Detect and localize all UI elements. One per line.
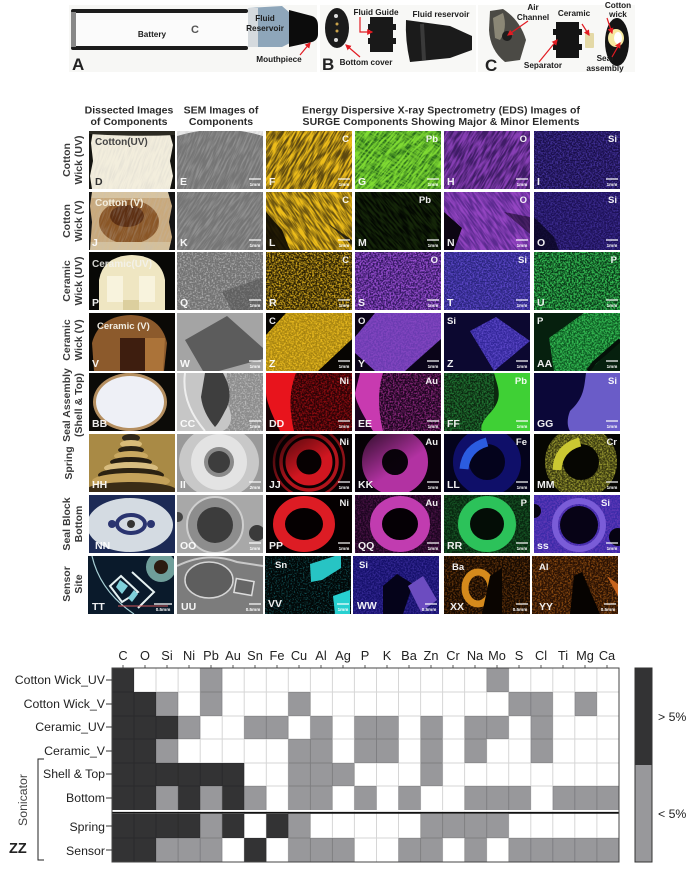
panel QQ: gold map: 1mm [428, 546, 438, 551]
panel I: silicon map [534, 131, 620, 189]
panel DD: nickel map [266, 373, 352, 431]
sample row labels: Cotton Wick_UV [15, 673, 106, 687]
panel WW: silicon map: Si [359, 560, 368, 571]
panel J: cotton wick V photo: Cotton (V) [95, 198, 143, 209]
panel T: silicon map: Si [518, 255, 527, 266]
row label: seal assembly: Seal Assembly [61, 368, 73, 442]
panel S: oxygen map: O [431, 255, 438, 266]
sample row labels [15, 673, 106, 858]
air channel shell: Channel [517, 13, 549, 22]
air channel shell: Air [527, 3, 540, 12]
panel U: phosphorus map [534, 252, 620, 310]
panel D: cotton wick UV photo: Cotton(UV) [95, 137, 148, 148]
panel W: ceramic V SEM: 1mm [250, 364, 260, 369]
element column labels: Sn [247, 648, 263, 663]
column heading: dissected images: Dissected Images [85, 104, 174, 116]
element column labels: S [515, 648, 523, 663]
panel PP: nickel map [266, 495, 352, 553]
element column labels: Fe [270, 648, 284, 663]
panel V: ceramic wick V photo [89, 313, 175, 371]
panel SS: silicon map: Si [601, 498, 610, 509]
cotton wick and seal assembly: Cotton [605, 1, 631, 10]
panel J: cotton wick V photo [89, 192, 175, 250]
panel QQ: gold map: QQ [358, 540, 374, 552]
panel Y: oxygen map: Y [358, 358, 365, 370]
battery: C [191, 24, 199, 36]
panel VV: tin map: Sn [275, 560, 287, 571]
panel EE: gold map [355, 373, 441, 431]
label A: A [72, 55, 84, 74]
panel RR: phosphorus map: 1mm [517, 546, 527, 551]
sample row labels: Sensor [66, 844, 105, 858]
bottom cover [325, 8, 393, 67]
panel F: carbon map: F [269, 176, 276, 188]
panel MM: chromium map [534, 434, 620, 492]
element column labels: Mg [576, 648, 594, 663]
panel WW: silicon map [353, 556, 439, 614]
panel AA: phosphorus map: P [537, 316, 544, 327]
panel YY: aluminum map: Al [539, 562, 548, 573]
element column labels: Al [315, 648, 327, 663]
panel D: cotton wick UV photo [89, 131, 175, 189]
panel E: cotton UV SEM: 1mm [250, 182, 260, 187]
panel U: phosphorus map: 1mm [607, 303, 617, 308]
panel SS: silicon map: 1mm [607, 546, 617, 551]
panel LL: iron map: LL [447, 479, 460, 491]
element column labels: Mo [488, 648, 506, 663]
sample row labels: Ceramic_V [44, 744, 106, 758]
panel FF: lead map: 1mm [517, 424, 527, 429]
heatmap background [112, 668, 619, 862]
panel JJ: nickel map: JJ [269, 479, 281, 491]
ceramic piece: Ceramic [558, 9, 591, 18]
panel Z: carbon map: 1mm [339, 364, 349, 369]
panel WW: silicon map: WW [357, 600, 377, 612]
panel U: phosphorus map: U [537, 297, 545, 309]
panel G: lead map: G [358, 176, 366, 188]
panel D: cotton wick UV photo: D [95, 176, 103, 188]
panel AA: phosphorus map: 1mm [607, 364, 617, 369]
panel F: carbon map [266, 131, 352, 189]
panel N: oxygen map: 1mm [517, 243, 527, 248]
panel V: ceramic wick V photo: Ceramic (V) [97, 321, 150, 332]
panel LL: iron map: 1mm [517, 485, 527, 490]
row label: cotton wick V: Wick (V) [73, 200, 85, 242]
panel G: lead map: Pb [426, 134, 438, 145]
panel II: spring SEM: 2mm [250, 485, 260, 490]
panel PP: nickel map: Ni [340, 498, 349, 509]
row label: cotton wick UV: Wick (UV) [73, 136, 85, 184]
panel JJ: nickel map: 1mm [339, 485, 349, 490]
panel TT: sensor site photo [88, 552, 176, 614]
panel CC: seal assembly SEM: 1mm [250, 424, 260, 429]
panel P: ceramic wick UV photo: Ceramic(UV) [92, 259, 152, 270]
panel Z: carbon map: C [269, 316, 276, 327]
fluid guide: Fluid Guide [353, 8, 399, 17]
panel N: oxygen map [444, 192, 530, 250]
column heading: dissected images: of Components [90, 116, 168, 128]
panel KK: gold map [355, 434, 441, 492]
panel R: carbon map: R [269, 297, 277, 309]
panel YY: aluminum map [532, 556, 618, 614]
panel S: oxygen map [355, 252, 441, 310]
panel N: oxygen map: O [520, 195, 527, 206]
panel S: oxygen map: S [358, 297, 365, 309]
panel QQ: gold map: Au [425, 498, 438, 509]
panel SS: silicon map: ss [537, 540, 549, 552]
sonicator bracket [38, 759, 44, 860]
panel Q: ceramic UV SEM: 1mm [250, 303, 260, 308]
element column labels: C [118, 648, 128, 663]
battery: Battery [138, 30, 167, 39]
element column labels: O [140, 648, 150, 663]
column heading: EDS images: SURGE Components Showing Major & Minor Elements [302, 116, 580, 128]
panel AA: phosphorus map: AA [537, 358, 553, 370]
panel Q: ceramic UV SEM [177, 252, 264, 310]
column heading: EDS images: Energy Dispersive X-ray Spectrometry (EDS) Images of [302, 104, 580, 116]
column heading: dissected images [85, 104, 174, 128]
panel SS: silicon map [527, 495, 627, 553]
panel XX: barium map [444, 556, 530, 614]
ceramic piece [558, 9, 594, 48]
panel K: cotton V SEM: 1mm [250, 243, 260, 248]
panel XX: barium map: Ba [452, 562, 465, 573]
top photo strip [69, 1, 635, 75]
panel Y: oxygen map: O [358, 316, 365, 327]
panel UU: sensor site SEM: 0.5mm [246, 607, 260, 612]
panel EE: gold map: EE [358, 418, 372, 430]
panel FF: lead map: Pb [515, 376, 527, 387]
panel VV: tin map: 1mm [338, 607, 348, 612]
cotton wick and seal assembly: Seal [597, 54, 613, 63]
element heatmap [9, 648, 619, 862]
element column labels: Ca [599, 648, 616, 663]
column heading: SEM images: SEM Images of [184, 104, 259, 116]
sample row labels: Cotton Wick_V [24, 697, 106, 711]
panel M: lead map: 1mm [428, 243, 438, 248]
element column labels: Ag [335, 648, 351, 663]
column ticks [123, 665, 607, 668]
panel U: phosphorus map: P [611, 255, 618, 266]
panel I: silicon map: I [537, 176, 540, 188]
panel I: silicon map: 1mm [607, 182, 617, 187]
panel Z: silicon map: Z [447, 358, 454, 370]
panel L: carbon map [266, 192, 352, 250]
panel GG: silicon map [534, 373, 620, 431]
panel R: carbon map [266, 252, 352, 310]
panel BB: seal assembly photo [89, 373, 175, 431]
panel Y: oxygen map [355, 313, 441, 371]
separator: Separator [524, 61, 563, 70]
panel JJ: nickel map: Ni [340, 437, 349, 448]
panel VV: tin map [265, 556, 351, 614]
mouthpiece [256, 10, 318, 64]
panel T: silicon map: 1mm [517, 303, 527, 308]
panel PP: nickel map: PP [269, 540, 283, 552]
heatmap grid [112, 668, 619, 862]
row label: spring: Spring [63, 446, 75, 480]
panel OO: seal block SEM [173, 495, 265, 553]
row label: cotton wick UV: Cotton [61, 143, 73, 177]
panel Z: silicon map: Si [447, 316, 456, 327]
panel V: ceramic wick V photo: V [92, 358, 99, 370]
panel GG: silicon map: GG [537, 418, 553, 430]
element column labels [118, 648, 616, 663]
bottom cover: Bottom cover [340, 58, 393, 67]
air channel shell [489, 3, 549, 62]
panel E: cotton UV SEM: E [180, 176, 187, 188]
cotton wick and seal assembly: wick [608, 10, 627, 19]
legend gray segment [635, 765, 652, 862]
panel UU: sensor site SEM [177, 556, 264, 614]
panel label ZZ: ZZ [9, 841, 27, 857]
panel CC: seal assembly SEM: CC [180, 418, 196, 430]
panel GG: silicon map: Si [608, 376, 617, 387]
panel KK: gold map: 1mm [428, 485, 438, 490]
row label: sensor site: Site [73, 574, 85, 594]
panel RR: phosphorus map: RR [447, 540, 463, 552]
element column labels: Pb [203, 648, 219, 663]
cotton wick and seal assembly: assembly [586, 64, 624, 73]
panel P: ceramic wick UV photo [89, 252, 175, 310]
panel YY: aluminum map: 0.5mm [601, 607, 615, 612]
panel L: carbon map: 1mm [339, 243, 349, 248]
panel F: carbon map: 1mm [339, 182, 349, 187]
panel HH: spring photo: HH [92, 479, 107, 491]
panel HH: spring photo [89, 434, 175, 492]
element column labels: Cl [535, 648, 547, 663]
panel LL: iron map: Fe [516, 437, 527, 448]
cotton wick and seal assembly [586, 1, 631, 73]
sample row labels: Bottom [66, 791, 105, 805]
panel H: oxygen map: H [447, 176, 455, 188]
panel NN: seal block photo: NN [95, 540, 110, 552]
heatmap frame [112, 668, 619, 862]
sonicator label: Sonicator [16, 774, 30, 826]
panel MM: chromium map: MM [537, 479, 555, 491]
panel G: lead map: 1mm [428, 182, 438, 187]
panel P: ceramic wick UV photo: P [92, 297, 99, 309]
panel R: carbon map: C [342, 255, 349, 266]
panel H: oxygen map: O [520, 134, 527, 145]
panel H: oxygen map: 1mm [517, 182, 527, 187]
panel JJ: nickel map [266, 434, 352, 492]
panel M: lead map [355, 192, 441, 250]
sample row labels: Shell & Top [43, 767, 105, 781]
panel OO: seal block SEM: 1mm [250, 546, 260, 551]
sample row labels: Ceramic_UV [35, 720, 106, 734]
panel RR: phosphorus map [444, 495, 530, 553]
panel MM: chromium map: Cr [606, 437, 617, 448]
panel WW: silicon map: 0.5mm [422, 607, 436, 612]
row label: seal assembly: (Shell & Top) [73, 373, 85, 437]
fluid reservoir shell [406, 10, 472, 62]
panel BB: seal assembly photo: BB [92, 418, 108, 430]
fluid guide [353, 8, 399, 52]
element column labels: Zn [424, 648, 438, 663]
panel E: cotton UV SEM [177, 131, 263, 189]
sample row labels: Spring [69, 820, 105, 834]
column heading: SEM images: Components [189, 116, 253, 128]
row label: seal block bottom: Seal Block [61, 497, 73, 551]
panel II: spring SEM: II [180, 479, 186, 491]
panel LL: iron map [444, 434, 530, 492]
image grid [88, 131, 620, 614]
row label: cotton wick V: Cotton [61, 204, 73, 238]
panel EE: gold map: Au [425, 376, 438, 387]
panel UU: sensor site SEM: UU [181, 601, 196, 613]
panel FF: lead map: FF [447, 418, 460, 430]
panel DD: nickel map: 1mm [339, 424, 349, 429]
separator [524, 22, 582, 70]
panel B: bottom cover, fluid guide, reservoir [320, 5, 476, 74]
panel AA: phosphorus map [534, 313, 620, 371]
double separator line [112, 810, 619, 812]
panel NN: seal block photo [87, 495, 175, 553]
panel A: assembled device [69, 5, 318, 74]
panel O: silicon map: Si [608, 195, 617, 206]
panel KK: gold map: Au [425, 437, 438, 448]
panel I: silicon map: Si [608, 134, 617, 145]
row label: ceramic wick UV: Wick (UV) [73, 257, 85, 305]
row label: sensor site: Sensor [61, 566, 73, 602]
panel T: silicon map: T [447, 297, 454, 309]
panel L: carbon map: L [269, 237, 276, 249]
panel W: ceramic V SEM [177, 313, 264, 371]
panel DD: nickel map: Ni [340, 376, 349, 387]
panel F: carbon map: C [342, 134, 349, 145]
element column labels: K [383, 648, 392, 663]
element column labels: Ba [401, 648, 418, 663]
mouthpiece: Mouthpiece [256, 55, 302, 64]
panel II: spring SEM [177, 434, 263, 492]
panel O: silicon map: 1mm [607, 243, 617, 248]
label C: C [485, 56, 497, 75]
row label: ceramic wick V: Ceramic [61, 319, 73, 361]
element column labels: Ni [183, 648, 195, 663]
panel DD: nickel map: DD [269, 418, 285, 430]
panel M: lead map: Pb [419, 195, 431, 206]
column heading: EDS images [302, 104, 580, 128]
gray cells: below five percent [156, 668, 619, 862]
panel QQ: gold map [355, 495, 441, 553]
fluid reservoir [246, 6, 290, 47]
panel EE: gold map: 1mm [428, 424, 438, 429]
panel N: oxygen map: N [447, 237, 455, 249]
legend dark segment [635, 668, 652, 765]
panel O: silicon map [534, 192, 620, 250]
panel OO: seal block SEM: OO [180, 540, 196, 552]
panel Z: silicon map: 1mm [517, 364, 527, 369]
panel J: cotton wick V photo: J [92, 237, 98, 249]
panel O: silicon map: O [537, 237, 545, 249]
battery [71, 9, 248, 50]
panel CC: seal assembly SEM [177, 373, 264, 431]
panel FF: lead map [444, 373, 530, 431]
panel H: oxygen map [444, 131, 530, 189]
panel Q: ceramic UV SEM: Q [180, 297, 188, 309]
panel R: carbon map: 1mm [339, 303, 349, 308]
row label: seal block bottom: Bottom [73, 506, 85, 542]
label B: B [322, 55, 334, 74]
panel Z: carbon map [266, 313, 352, 371]
legend frame [635, 668, 652, 862]
panel KK: gold map: KK [358, 479, 374, 491]
panel S: oxygen map: 1mm [428, 303, 438, 308]
row label: ceramic wick V: Wick (V) [73, 319, 85, 361]
panel T: silicon map [444, 252, 530, 310]
element column labels: Au [225, 648, 241, 663]
panel L: carbon map: C [342, 195, 349, 206]
panel Y: oxygen map: 1mm [428, 364, 438, 369]
panel XX: barium map: 0.5mm [513, 607, 527, 612]
element column labels: P [361, 648, 369, 663]
panel VV: tin map: VV [268, 598, 282, 610]
legend label: below five percent: < 5% [658, 807, 686, 821]
element column labels: Ti [558, 648, 568, 663]
panel MM: chromium map: 1mm [607, 485, 617, 490]
fluid reservoir shell: Fluid reservoir [413, 10, 470, 19]
panel K: cotton V SEM: K [180, 237, 188, 249]
fluid reservoir: Fluid [255, 14, 275, 23]
legend label: above five percent: > 5% [658, 710, 686, 724]
panel TT: sensor site photo: 0.5mm [156, 607, 170, 612]
element column labels: Si [161, 648, 173, 663]
colour legend [635, 668, 686, 862]
panel Z: silicon map [444, 313, 530, 371]
panel W: ceramic V SEM: W [180, 358, 190, 370]
panel GG: silicon map: 1mm [607, 424, 617, 429]
element column labels: Cr [446, 648, 460, 663]
element column labels: Na [467, 648, 484, 663]
dark cells: above five percent [112, 668, 288, 862]
panel RR: phosphorus map: P [521, 498, 528, 509]
element column labels: Cu [291, 648, 307, 663]
panel C: internal parts [478, 1, 635, 75]
panel PP: nickel map: 1mm [339, 546, 349, 551]
panel G: lead map [355, 131, 441, 189]
panel M: lead map: M [358, 237, 367, 249]
panel K: cotton V SEM [177, 192, 263, 250]
panel YY: aluminum map: YY [539, 601, 553, 613]
panel XX: barium map: XX [450, 601, 464, 613]
column heading: SEM images [184, 104, 259, 128]
panel TT: sensor site photo: TT [92, 601, 105, 613]
row ticks [106, 680, 112, 850]
panel Z: carbon map: Z [269, 358, 276, 370]
fluid reservoir: Reservoir [246, 24, 285, 33]
row label: ceramic wick UV: Ceramic [61, 260, 73, 302]
